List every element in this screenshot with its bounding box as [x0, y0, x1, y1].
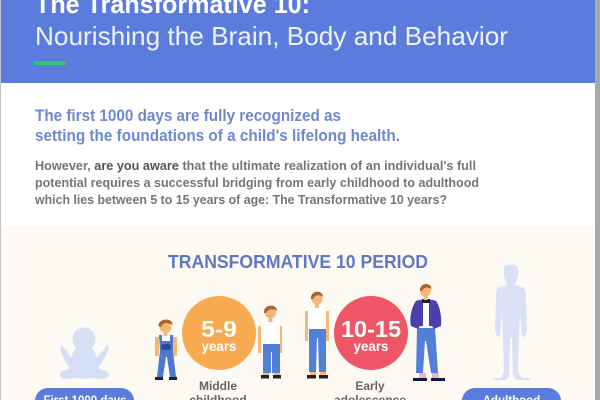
label: middle childhood: Middle	[199, 379, 237, 393]
icon: teen in purple jacket	[410, 284, 445, 381]
section heading: TRANSFORMATIVE 10 PERIOD	[168, 252, 428, 272]
icon: teen in white shirt	[305, 292, 329, 378]
label: middle childhood	[189, 379, 247, 400]
panel: timeline background	[1, 226, 595, 400]
body paragraph: which lies between 5 to 15 years of age: The Transformative 10 years?	[34, 193, 447, 207]
green accent bar	[34, 61, 66, 65]
age circle: 10-15 years: years	[354, 338, 389, 354]
age circle: 5-9 years: years	[202, 338, 237, 354]
subtitle: Nourishing the Brain, Body and Behavior	[35, 21, 508, 51]
label: early adolescence: Early	[355, 379, 385, 393]
label: early adolescence	[334, 379, 406, 400]
age circle: 5-9 years: 5-9	[201, 316, 237, 342]
intro statement: The first 1000 days are fully recognized as	[35, 107, 341, 125]
body paragraph: However, are you aware that the ultimate realization of an individual's full	[35, 159, 476, 173]
intro statement: setting the foundations of a child's lifelong health.	[35, 127, 400, 145]
pill: first 1000 days	[35, 388, 134, 400]
icon: boy in overalls	[155, 319, 177, 380]
age circle: 10-15 years	[334, 296, 408, 370]
age circle: 10-15 years: 10-15	[341, 316, 401, 342]
body paragraph	[34, 159, 479, 207]
icon: baby silhouette	[60, 328, 109, 379]
pill: adulthood	[462, 388, 561, 400]
body paragraph: potential requires a successful bridging from early childhood to adulthood	[35, 176, 479, 190]
intro statement	[35, 107, 400, 145]
panel: early adolescence	[305, 284, 445, 400]
header banner	[1, 0, 595, 83]
icon: boy in white shirt	[258, 306, 282, 378]
panel: middle childhood	[155, 296, 282, 400]
age circle: 5-9 years	[182, 296, 256, 370]
icon: adult silhouette	[493, 264, 530, 380]
